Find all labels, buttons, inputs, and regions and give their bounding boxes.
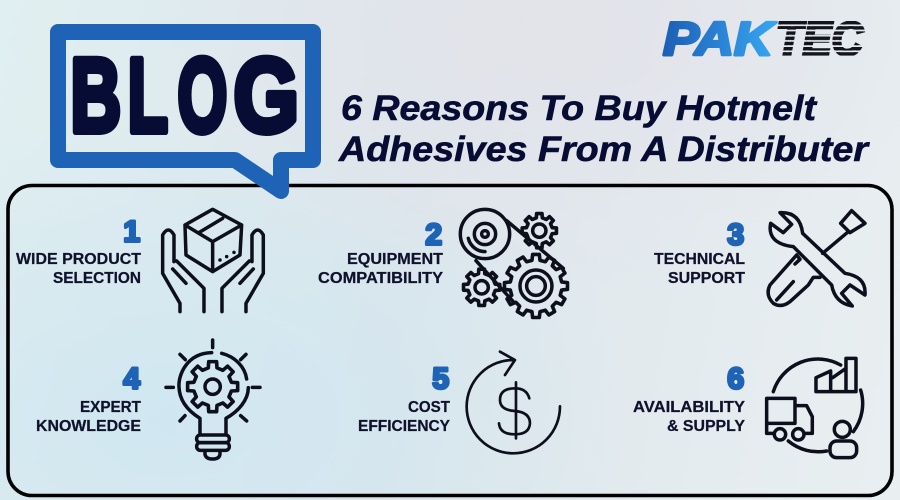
reason 1 label [16, 216, 142, 287]
reason 2 label [318, 218, 444, 287]
reason 6 label: & SUPPLY [667, 418, 746, 435]
reason 6 label: AVAILABILITY [633, 399, 746, 416]
title [338, 89, 871, 169]
title: Adhesives From A Distributer [338, 130, 871, 169]
icon: belt and gears [460, 209, 567, 317]
reason 2 label: 2 [425, 218, 442, 252]
reason 1 label: 1 [123, 216, 140, 248]
reason 6 label: 6 [727, 362, 744, 396]
reason 3 label [654, 218, 746, 287]
reason 1 label: WIDE PRODUCT [16, 251, 142, 268]
reason 5 label: EFFICIENCY [358, 418, 451, 435]
reason 2 label: EQUIPMENT [347, 251, 444, 268]
reason 4 label: EXPERT [80, 399, 142, 416]
reason 6 label [633, 362, 746, 435]
blog speech bubble [58, 32, 313, 191]
reason 5 label: 5 [432, 362, 449, 396]
reason 4 label: 4 [123, 362, 140, 396]
reason 4 label [36, 362, 142, 435]
blog word: G [234, 38, 299, 155]
reason 1 label: SELECTION [53, 270, 141, 287]
reason 3 label: 3 [727, 218, 744, 252]
logo: Paktec: TEC [776, 12, 864, 65]
reason 5 label: COST [408, 399, 451, 416]
reason 5 label [358, 362, 451, 435]
panel: reasons [8, 186, 892, 496]
logo: Paktec [663, 12, 864, 65]
reason 2 label: COMPATIBILITY [318, 270, 444, 287]
title: 6 Reasons To Buy Hotmelt [341, 89, 817, 128]
reason 3 label: TECHNICAL [654, 251, 745, 268]
icon: supply cycle [767, 358, 863, 458]
blog word: L [128, 37, 168, 154]
icon: light bulb with gear [166, 340, 260, 459]
blog word: B [70, 36, 121, 154]
logo: Paktec: PAK [663, 12, 777, 65]
icon: dollar with circular arrow [467, 352, 560, 453]
reason 3 label: SUPPORT [668, 270, 746, 287]
blog word [70, 36, 299, 155]
reason 4 label: KNOWLEDGE [36, 418, 141, 435]
icon: hands holding box [163, 209, 263, 312]
icon: wrench and screwdriver [768, 211, 865, 306]
blog word: O [178, 37, 227, 154]
